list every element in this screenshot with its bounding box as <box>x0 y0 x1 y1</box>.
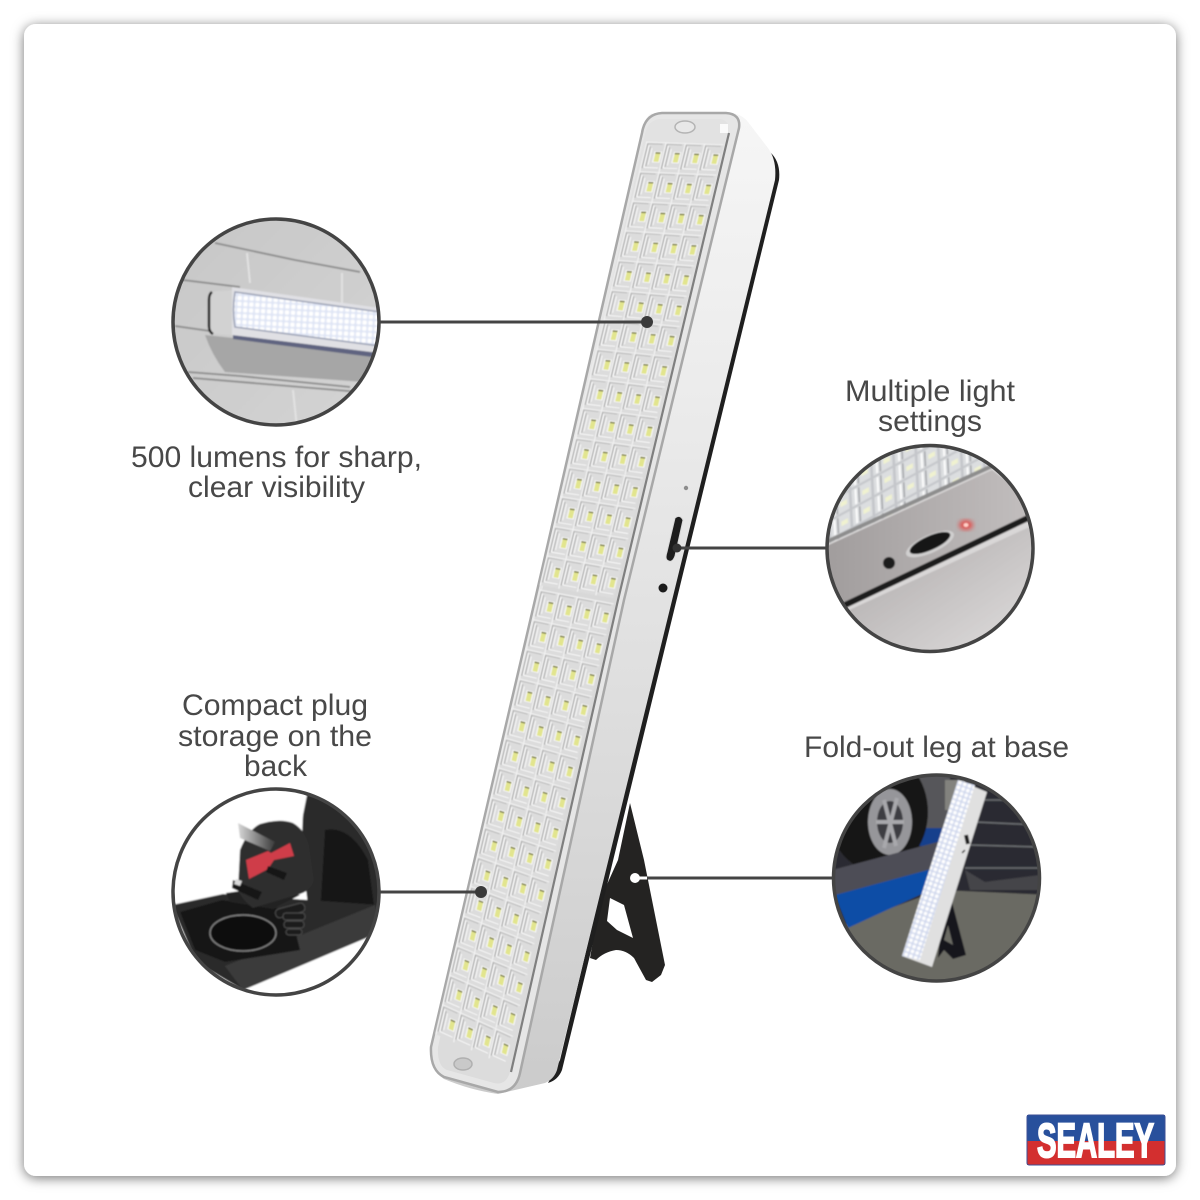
heading: plug storage: storage on the <box>178 720 372 753</box>
miniature light body <box>902 780 987 967</box>
callout line: plug storage <box>380 886 487 898</box>
surface below <box>850 527 1031 650</box>
tyre <box>839 778 928 864</box>
rear panel <box>301 796 378 906</box>
slide switch <box>906 530 954 558</box>
light setting switch <box>666 516 683 561</box>
inset circle: workshop scene <box>832 773 1042 983</box>
heading: fold-out leg: Fold-out leg at base <box>804 731 1069 764</box>
miniature switch <box>963 835 968 852</box>
heading: plug storage: back <box>244 750 308 783</box>
heading: plug storage <box>178 689 372 783</box>
plug top pin <box>238 823 275 851</box>
inset circle: wall-mounted light <box>171 217 381 427</box>
red pin shutter <box>246 843 294 879</box>
heading: lumens <box>131 441 422 504</box>
heading: light settings <box>845 375 1016 438</box>
callout line: lumens <box>380 316 653 328</box>
callout line: light settings <box>672 544 828 552</box>
lower pins <box>232 880 262 900</box>
object in background <box>965 870 1040 890</box>
charge socket <box>658 584 668 592</box>
lens panel <box>438 119 728 1084</box>
LED grid <box>435 142 723 1066</box>
plug base flap <box>226 888 300 909</box>
socket <box>883 557 895 569</box>
inset circle: switch close-up <box>825 444 1035 654</box>
red indicator <box>959 520 973 530</box>
cable grommet <box>274 902 306 935</box>
callout line: fold-out leg <box>630 873 833 883</box>
floor <box>846 890 1036 980</box>
heading: lumens: 500 lumens for sharp, <box>131 441 422 474</box>
plug body <box>238 821 314 908</box>
miniature lens <box>902 780 975 960</box>
miniature leg <box>938 902 966 959</box>
blue platform side <box>835 868 935 928</box>
wheel rim <box>868 789 912 855</box>
tray <box>172 894 380 990</box>
black rear edge <box>548 152 779 1083</box>
heading: light settings: settings <box>878 405 982 438</box>
background wall <box>918 776 951 829</box>
silver trim <box>822 466 992 544</box>
stairs <box>965 800 1040 868</box>
LED panel close-up <box>830 448 986 538</box>
brick wall <box>174 220 376 424</box>
inset circle: plug storage <box>171 787 381 997</box>
hanging tab <box>675 121 728 133</box>
blue back panel <box>918 827 942 847</box>
platform top <box>835 841 938 896</box>
heading: lumens: clear visibility <box>188 471 365 504</box>
fold-out leg <box>590 803 665 982</box>
light body <box>431 112 775 1094</box>
heading: plug storage: Compact plug <box>182 689 368 722</box>
heading: light settings: Multiple light <box>845 375 1016 408</box>
mounted light underside <box>233 335 380 358</box>
mounted light end <box>210 290 240 336</box>
shadow under light <box>205 335 378 383</box>
side panel <box>828 470 1026 603</box>
coiled cable <box>210 915 276 951</box>
lower sensor <box>454 1058 472 1070</box>
lens right inner line <box>511 133 729 1072</box>
lens frame <box>431 113 739 1092</box>
glowing lens <box>234 292 380 346</box>
product: LED work light <box>431 112 779 1094</box>
black edge strip <box>843 517 1030 606</box>
indicator dot <box>684 486 688 490</box>
